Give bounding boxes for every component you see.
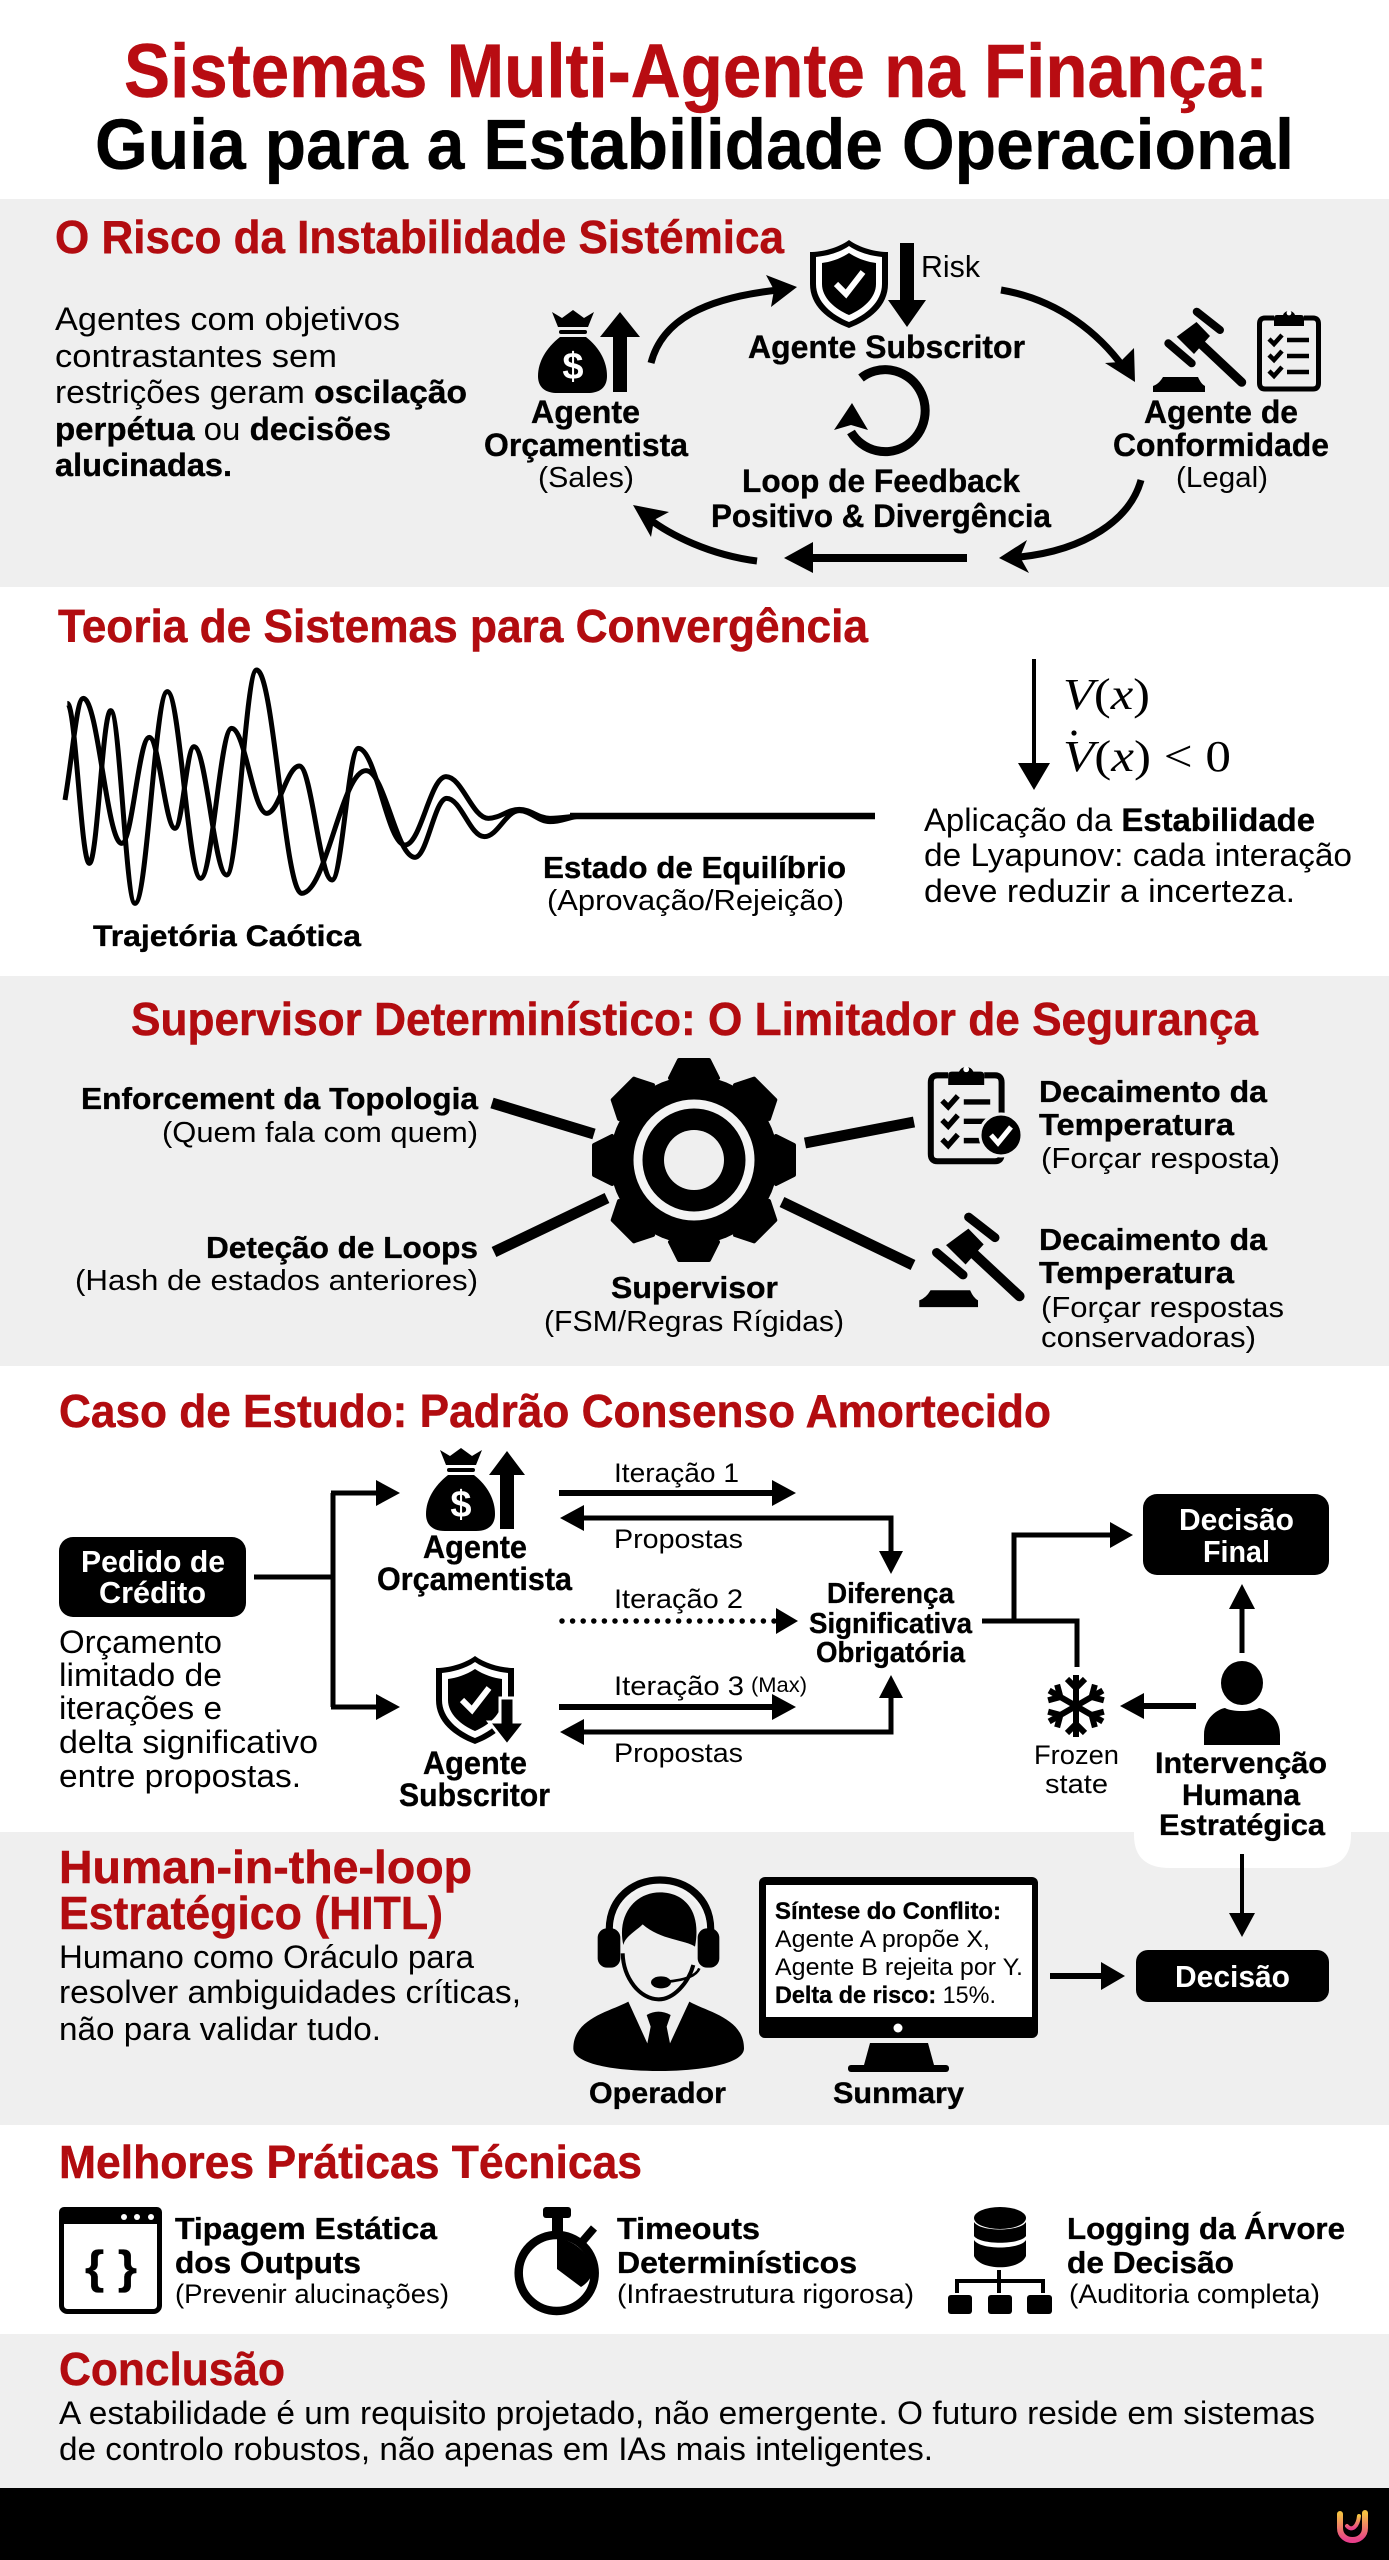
label: supervisor: Supervisor [611,1270,778,1305]
label: estado de equilibrio [543,850,846,917]
label: agente orcamentista [484,394,688,494]
text block: de controlo robustos, não apenas em IAs mais inteligentes. [59,2431,933,2467]
label: decaimento 2: Decaimento da [1039,1222,1268,1257]
box: pedido de credito [59,1537,246,1617]
icon: gavel [919,1217,1019,1307]
text block: delta significativo [59,1724,318,1760]
label: decaimento 1: Decaimento da [1039,1074,1268,1109]
formula: lyapunov [1063,670,1231,781]
arrow: intervencao para decisao [1229,1854,1255,1937]
text block: Humano como Oráculo para [59,1939,474,1975]
label: diferenca significativa: Significativa [809,1608,973,1640]
practice: logging: (Auditoria completa) [1069,2279,1320,2309]
label: agente subscritor: Agente Subscritor [748,329,1025,365]
text block: Orçamento [59,1624,222,1660]
arrow: loop central [784,542,967,573]
label: agente subscritor: Subscritor [399,1777,550,1813]
text block: deve reduzir a incerteza. [924,873,1295,909]
heading: Human-in-the-loop [59,1841,472,1893]
label: decaimento 1: (Forçar resposta) [1041,1143,1280,1175]
iteration 1: Iteração 1 [614,1458,739,1488]
iteration 2 [562,1584,798,1634]
iteration 1 [559,1458,796,1506]
chart: chaotic trajectories converging [65,670,875,903]
arrow: orcamentista para subscritor [651,275,797,363]
label: frozen state: Frozen [1034,1740,1119,1770]
icon: database tree [948,2207,1052,2314]
label: agente de conformidade [1113,394,1329,494]
label: frozen state: state [1045,1769,1108,1799]
label: estado de equilibrio: (Aprovação/Rejeição) [547,885,844,917]
label: diferenca significativa [809,1578,973,1669]
label: intervencao humana: Estratégica [1159,1809,1325,1842]
label: frozen state [1034,1740,1119,1799]
icon: logo [1340,2513,1365,2540]
monitor text: Agente A propõe X, [775,1926,990,1953]
label: intervencao humana: Humana [1182,1779,1300,1812]
label: agente orcamentista: (Sales) [538,462,634,494]
panel: teoria de sistemas [0,587,1389,976]
practice: timeouts: Determinísticos [617,2245,857,2280]
heading [59,1841,472,1939]
iteration 3 [559,1671,807,1720]
heading: Teoria de Sistemas para Convergência [58,600,868,652]
text block: entre propostas. [59,1758,301,1794]
arrow: para decisao [1050,1962,1125,1990]
box: decisao final [1143,1494,1329,1575]
label: intervencao humana [1155,1747,1327,1842]
arrow: pedido para agentes [254,1480,400,1720]
text block: alucinadas. [55,447,232,483]
label: decaimento 2: (Forçar respostas [1041,1292,1284,1324]
label: diferenca significativa: Obrigatória [816,1637,966,1669]
box: decisao final: Final [1203,1534,1270,1569]
box: decisao [1136,1950,1329,2002]
monitor text: Agente B rejeita por Y. [775,1954,1023,1981]
icon: agente orcamentista [538,310,640,393]
arrow: intervencao para frozen [1120,1693,1196,1719]
iteration 3: (Max) [751,1674,807,1697]
label: supervisor: (FSM/Regras Rígidas) [544,1306,844,1338]
icon: code window [59,2207,162,2312]
iteration 2: Iteração 2 [614,1584,743,1614]
text block: limitado de [59,1657,222,1693]
footer bar [0,2488,1389,2560]
monitor text: Delta de risco: 15%. [775,1982,996,2009]
propostas 1 [560,1505,903,1574]
icon: code window: { } [85,2241,137,2293]
practice: tipagem estatica [175,2211,449,2309]
text block: A estabilidade é um requisito projetado, não emergente. O futuro reside em sistemas [59,2395,1315,2431]
panel: melhores praticas [0,2125,1389,2334]
label: intervencao humana: Intervenção [1155,1747,1327,1780]
text block [59,1624,318,1794]
icon: loop [834,370,925,452]
text block: Aplicação da Estabilidade [924,802,1315,838]
arrow: lyapunov [1018,659,1050,790]
box: decisao final: Decisão [1179,1502,1294,1537]
heading: Melhores Práticas Técnicas [59,2136,642,2188]
box: decisao: Decisão [1175,1959,1290,1994]
label: agente orcamentista [377,1529,572,1597]
icon: monitor [759,1877,1038,2072]
monitor text [775,1898,1023,2009]
propostas 2 [560,1675,903,1768]
label: summary: Sunmary [833,2077,964,2110]
label: estado de equilibrio: Estado de Equilíbrio [543,850,846,885]
practice: timeouts: (Infraestrutura rigorosa) [617,2279,914,2309]
label: decaimento 2 [1039,1222,1284,1354]
label: agente de conformidade: Conformidade [1113,427,1329,463]
icon: stopwatch [519,2207,595,2311]
practice: tipagem estatica: dos Outputs [175,2245,361,2280]
icon: clipboard check [931,1066,1022,1161]
icon: snowflake [1045,1675,1107,1737]
label: loop de feedback [711,463,1051,534]
practice: logging [1067,2211,1345,2309]
practice: logging: de Decisão [1067,2245,1234,2280]
label: agente subscritor: Agente [423,1745,527,1781]
text block: perpétua ou decisões [55,411,391,447]
title [95,29,1294,185]
arrow: diferenca para decisao final [982,1522,1133,1667]
label: detecao de loops: (Hash de estados anteriores) [75,1265,478,1297]
arrow: subscritor para conformidade [1001,290,1135,382]
text block [924,802,1352,909]
title: Sistemas Multi-Agente na Finança: [124,29,1268,114]
propostas 1: Propostas [614,1524,743,1554]
label: supervisor [544,1270,844,1338]
heading: Caso de Estudo: Padrão Consenso Amortecido [59,1385,1051,1437]
label: decaimento 1 [1039,1074,1280,1175]
label: detecao de loops: Deteção de Loops [206,1230,478,1265]
practice: timeouts: Timeouts [617,2211,760,2246]
panel: supervisor deterministico [0,976,1389,1366]
connector lines [492,1103,914,1265]
icon: agente subscritor [810,240,980,328]
propostas 2: Propostas [614,1738,743,1768]
practice: timeouts [617,2211,914,2309]
label: agente orcamentista: Agente [423,1529,527,1565]
icon: agente subscritor: Risk [921,249,980,284]
label: enforcement da topologia: Enforcement da Topologia [81,1081,479,1116]
label: diferenca significativa: Diferença [827,1578,955,1610]
label: agente de conformidade: (Legal) [1176,462,1268,494]
practice: logging: Logging da Árvore [1067,2211,1345,2246]
formula: lyapunov: V(x) [1063,670,1150,719]
text block: contrastantes sem [55,338,337,374]
icon: agente de conformidade [1153,311,1318,392]
heading: Estratégico (HITL) [59,1887,443,1939]
text block [59,1939,521,2047]
heading: O Risco da Instabilidade Sistémica [55,211,784,263]
box: pedido de credito: Crédito [99,1575,206,1610]
label: enforcement da topologia [81,1081,479,1149]
label: decaimento 2: Temperatura [1039,1255,1235,1290]
iteration 3: Iteração 3 [614,1671,744,1701]
text block: não para validar tudo. [59,2011,381,2047]
icon: agente subscritor [436,1656,525,1745]
heading: Supervisor Determinístico: O Limitador de Segurança [131,993,1258,1045]
label: decaimento 1: Temperatura [1039,1107,1235,1142]
label: operador: Operador [589,2077,726,2110]
icon: agente orcamentista [426,1448,525,1531]
text block [55,301,467,483]
panel: conclusao [0,2334,1389,2488]
label: enforcement da topologia: (Quem fala com quem) [162,1117,478,1149]
practice: tipagem estatica: Tipagem Estática [175,2211,438,2246]
label: decaimento 2: conservadoras) [1041,1322,1256,1354]
text block: iterações e [59,1690,222,1726]
label: agente orcamentista: Orçamentista [484,427,688,463]
practice: tipagem estatica: (Prevenir alucinações) [175,2279,449,2309]
icon: gear [594,1060,794,1260]
panel: human-in-the-loop [0,1832,1389,2125]
icon: pessoa [1204,1661,1280,1745]
arrow: intervencao para decisao final [1229,1584,1255,1653]
arrow: conformidade para loop [999,480,1141,573]
title: Guia para a Estabilidade Operacional [95,106,1294,185]
white notch [1134,1832,1351,1868]
label: detecao de loops [75,1230,478,1297]
monitor text: Síntese do Conflito: [775,1898,1001,1925]
label: trajetoria caotica: Trajetória Caótica [93,920,361,953]
heading: Conclusão [59,2343,285,2395]
label: agente orcamentista: Agente [531,394,640,430]
text block: resolver ambiguidades críticas, [59,1974,521,2010]
text block: de Lyapunov: cada interação [924,837,1352,873]
text block: Agentes com objetivos [55,301,400,337]
formula: lyapunov: V(x) < 0 [1063,732,1231,781]
label: loop de feedback: Loop de Feedback [742,463,1020,499]
panel: caso de estudo [59,1385,1329,1842]
iteration arrows [559,1458,903,1768]
text block: restrições geram oscilação [55,374,467,410]
label: agente subscritor [399,1745,550,1813]
label: agente orcamentista: Orçamentista [377,1561,572,1597]
text block [59,2395,1315,2467]
label: agente de conformidade: Agente de [1144,394,1298,430]
box: pedido de credito: Pedido de [81,1544,225,1579]
icon: operador [573,1880,744,2071]
arrow: loop para orcamentista [633,505,757,561]
panel: risco da instabilidade [0,199,1389,587]
label: loop de feedback: Positivo & Divergência [711,498,1051,534]
